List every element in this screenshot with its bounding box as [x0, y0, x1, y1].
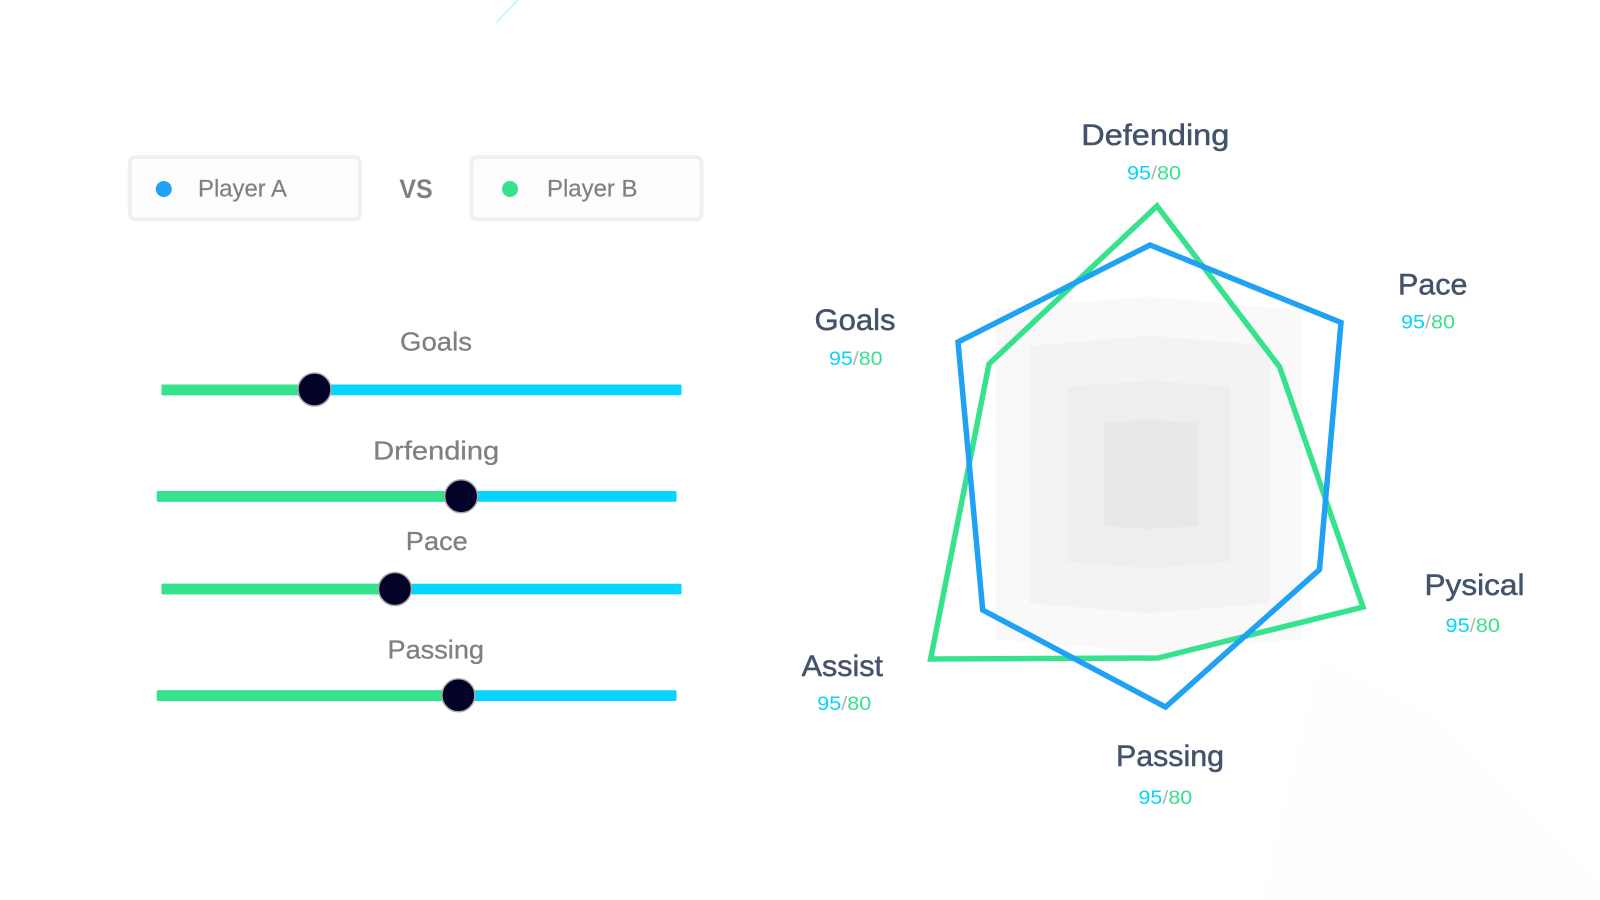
player B polygon: [931, 206, 1363, 659]
radar label: Pace: Pace: [1398, 268, 1468, 302]
radar label: Goals: [814, 304, 896, 370]
slider: Goals: Goals: [400, 326, 472, 356]
slider: Pace: Pace: [406, 526, 468, 556]
radar label: Assist: 95/80: [817, 694, 871, 715]
radar label: Pace: 95/80: [1401, 312, 1455, 334]
radar label: Defending: 95/80: [1127, 163, 1181, 184]
radar label: Passing: Passing: [1116, 740, 1224, 773]
versus label: VS: [399, 174, 433, 204]
radar background rings: [995, 297, 1302, 652]
player A chip: [130, 157, 360, 220]
radar label: Goals: Goals: [814, 304, 896, 337]
panel: comparison sliders: [157, 326, 682, 712]
radar label: Pysical: 95/80: [1446, 616, 1500, 637]
slider: Goals: [162, 326, 682, 406]
radar label: Defending: [1081, 119, 1229, 184]
radar label: Assist: Assist: [802, 650, 884, 683]
player B chip: Player B: [547, 176, 638, 203]
player A polygon: [958, 245, 1341, 707]
radar label: Passing: [1116, 740, 1224, 809]
radar label: Goals: 95/80: [829, 349, 883, 370]
radar label: Pace: [1398, 268, 1468, 334]
player A chip: Player A: [198, 176, 287, 203]
slider: Drfending: [157, 435, 677, 513]
panel: player selector: [130, 157, 702, 220]
radar label: Pysical: Pysical: [1424, 569, 1524, 602]
slider: Passing: [157, 635, 677, 712]
slider: Pace: [162, 526, 682, 606]
slider: Passing: Passing: [388, 635, 484, 665]
radar label: Assist: [802, 650, 884, 715]
radar label: Defending: Defending: [1081, 119, 1229, 152]
radar label: Passing: 95/80: [1138, 788, 1192, 809]
radar label: Pysical: [1424, 569, 1524, 637]
player B chip: [472, 157, 702, 220]
radar chart: [931, 206, 1363, 707]
slider: Drfending: Drfending: [373, 435, 499, 465]
